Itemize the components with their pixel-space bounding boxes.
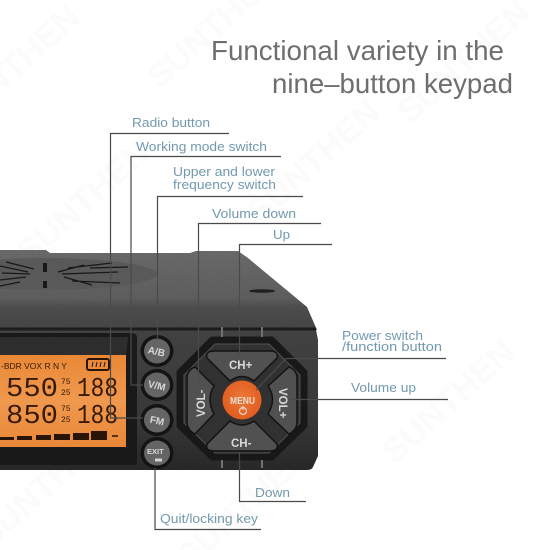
- line: frequency: [158, 196, 303, 340]
- button V/M: V/M: [147, 379, 166, 394]
- key CH-: [207, 421, 277, 451]
- button EXIT: EXIT: [147, 447, 164, 456]
- label: power switch: [342, 328, 442, 354]
- LCD screen: 25: [61, 389, 71, 398]
- line: radio button: [110, 134, 229, 418]
- label: frequency switch: Upper and lower: [173, 164, 276, 179]
- line: power: [256, 358, 446, 390]
- button FM: FM: [149, 415, 165, 428]
- speaker grille: [0, 258, 157, 290]
- LCD screen: 850: [6, 402, 58, 432]
- label: frequency switch: [173, 164, 276, 192]
- display bezel: [0, 333, 137, 465]
- menu button: MENU: [230, 396, 255, 407]
- key VOL-: VOL-: [196, 389, 208, 417]
- button A/B: A/B: [147, 345, 166, 360]
- line: volume down: [198, 224, 321, 382]
- key VOL-: [187, 367, 214, 434]
- device texture: [0, 250, 318, 470]
- key VOL+: VOL+: [276, 388, 288, 419]
- label: up: Up: [273, 227, 290, 242]
- title: [211, 35, 513, 99]
- radio device: [0, 250, 318, 470]
- key VOL+: [268, 367, 297, 434]
- LCD screen: [0, 355, 126, 447]
- leader lines: [110, 134, 448, 530]
- device front: [0, 330, 318, 470]
- menu button: [222, 380, 262, 420]
- watermarks: SUNTHEN: [375, 333, 522, 471]
- device top surface: [0, 250, 317, 330]
- LCD screen: 25: [61, 416, 71, 425]
- key CH-: CH-: [231, 438, 252, 450]
- line: down: [240, 452, 306, 502]
- keypad octagon: [179, 339, 305, 458]
- line: up: [240, 244, 332, 355]
- label: quit/locking key: Quit/locking key: [160, 511, 259, 526]
- title: Functional variety in the: [211, 35, 504, 66]
- LCD screen: 75: [61, 405, 71, 414]
- line: working mode: [131, 156, 281, 385]
- key CH+: [207, 351, 277, 381]
- label: power switch: Power switch: [342, 328, 423, 343]
- LCD screen: 75: [61, 378, 71, 387]
- label: volume down: Volume down: [212, 206, 296, 221]
- LCD screen: 188: [77, 375, 118, 405]
- label: radio button: Radio button: [132, 115, 210, 130]
- key CH+: CH+: [229, 360, 253, 372]
- line: volume up: [290, 398, 448, 400]
- label: frequency switch: frequency switch: [173, 177, 276, 192]
- label: down: Down: [255, 485, 290, 500]
- top screw slot: [249, 289, 275, 293]
- side buttons: [140, 335, 174, 469]
- line: quit: [155, 468, 261, 530]
- label: volume up: Volume up: [351, 380, 416, 395]
- label: working mode switch: Working mode switch: [136, 139, 267, 154]
- LCD screen: -BDR VOX R N Y: [1, 361, 67, 371]
- label: power switch: /function button: [342, 339, 442, 354]
- watermarks: SUNTHEN: [240, 93, 387, 231]
- LCD screen: 550: [6, 375, 58, 405]
- watermarks: SUNTHEN: [10, 133, 157, 271]
- LCD screen: 188: [77, 402, 118, 432]
- title: nine–button keypad: [272, 68, 513, 99]
- keypad: [179, 327, 305, 468]
